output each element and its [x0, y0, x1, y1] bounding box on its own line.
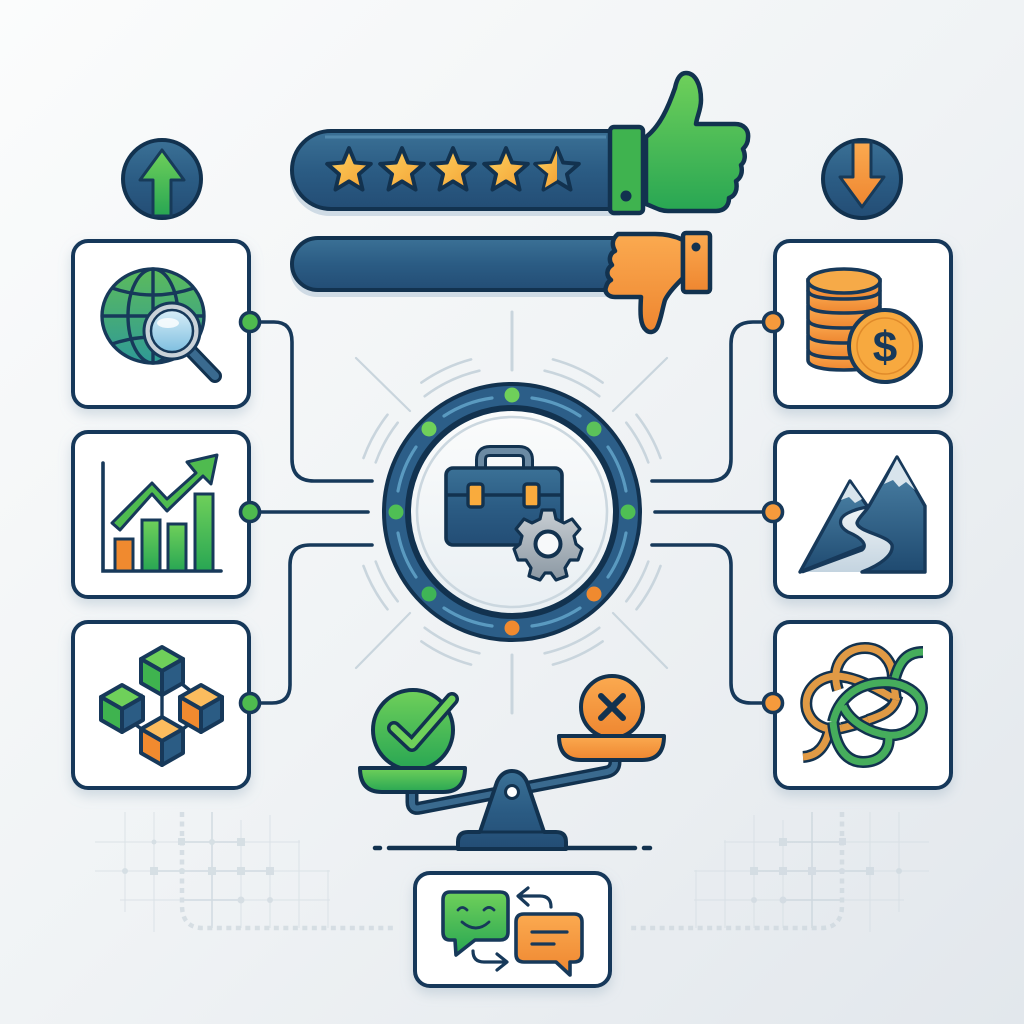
connector dots: right — [764, 312, 782, 712]
icon: cross ball — [581, 676, 643, 738]
icon: dollar coin: $ — [873, 323, 897, 372]
rating bar with stars and thumbs up — [290, 73, 748, 216]
left pan — [360, 768, 465, 792]
icon: winding road — [802, 507, 891, 572]
icon: exchange arrow bottom — [473, 951, 507, 970]
central hub ring — [388, 388, 636, 636]
icon: right mountain — [857, 457, 925, 572]
connector lines: right — [652, 322, 763, 703]
panel: tangled knot — [775, 622, 951, 788]
icon: globe — [102, 269, 204, 363]
icon: coin stack — [808, 269, 880, 370]
panel: coin cost — [775, 241, 951, 407]
icon: check ball — [373, 690, 453, 770]
icon: orange bottom block — [141, 717, 183, 765]
panel: conversation — [415, 873, 610, 986]
icon: orange right block — [180, 685, 222, 732]
connector dots: left — [240, 312, 260, 712]
icon: green left block — [101, 685, 143, 732]
icon: orange overlap strand — [868, 700, 896, 720]
balance scale — [360, 676, 664, 849]
radiating rays around the hub — [356, 312, 667, 713]
icon: orange message bubble — [516, 914, 582, 975]
icon: exchange arrow top — [518, 888, 551, 907]
thumbs down hand — [605, 234, 683, 332]
stars — [327, 148, 579, 190]
chart axes — [103, 463, 221, 571]
background grid: right — [629, 812, 929, 932]
block links — [122, 684, 202, 735]
thumbs up cuff — [610, 127, 643, 213]
icon: road edge — [802, 507, 868, 572]
panel: growth chart — [73, 432, 249, 597]
bar chart — [115, 494, 213, 571]
icon: briefcase — [446, 451, 562, 545]
background grid: left — [95, 812, 395, 932]
panel: mountain road — [775, 432, 951, 597]
connector lines: left — [260, 322, 372, 703]
scale beam — [412, 756, 615, 808]
icon: green top block — [141, 647, 183, 695]
icon: left mountain — [800, 481, 872, 572]
icon: orange strands — [803, 648, 896, 757]
thumbs up hand — [646, 73, 748, 211]
thumbs down cuff — [683, 233, 710, 292]
icon: green smile bubble — [443, 892, 508, 955]
icon: dollar coin — [849, 310, 921, 382]
ring status dots — [388, 388, 636, 636]
negative bar with thumbs down — [290, 233, 710, 332]
icon: snow caps — [841, 459, 915, 503]
icon: gear — [514, 510, 582, 580]
icon: green strands — [833, 652, 923, 762]
scale base — [458, 771, 566, 849]
trend arrow — [112, 455, 217, 530]
icon: up arrow badge — [123, 140, 201, 218]
right pan — [559, 736, 664, 760]
ring highlights — [398, 398, 626, 626]
ground line — [375, 846, 650, 850]
icon: down arrow badge — [823, 140, 901, 218]
icon: magnifying glass — [144, 303, 215, 376]
panel: connected blocks — [73, 622, 249, 788]
panel: global search — [73, 241, 249, 407]
